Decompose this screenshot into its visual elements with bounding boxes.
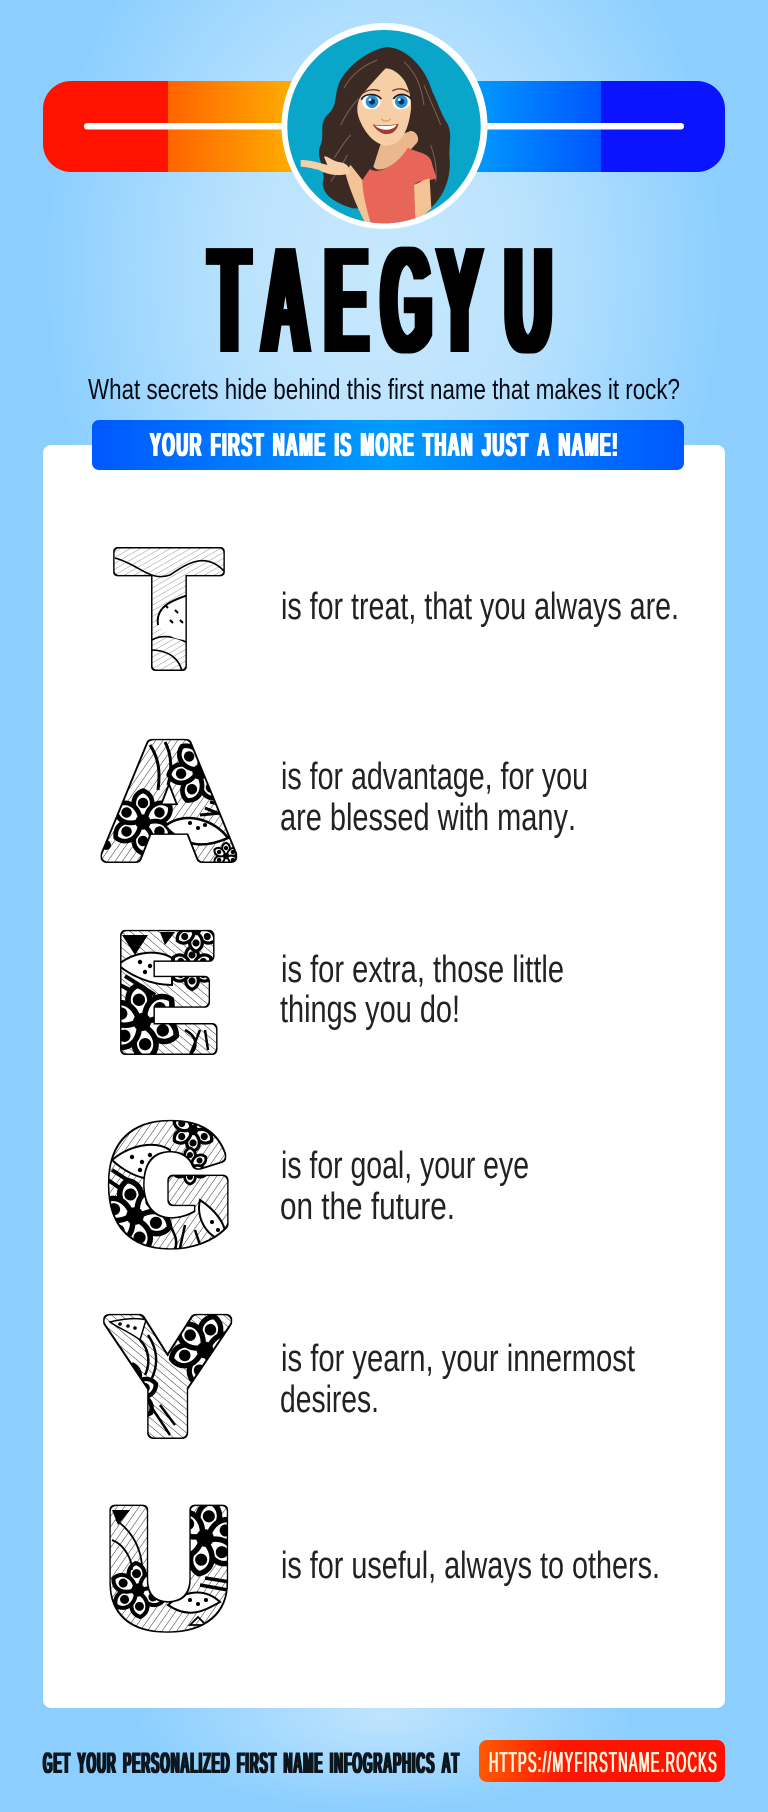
text for G: on the future.	[280, 1186, 455, 1228]
row G	[108, 1120, 528, 1250]
row A	[100, 738, 586, 863]
decorated letter G	[108, 1120, 229, 1250]
row T	[113, 547, 676, 671]
text for A: are blessed with many.	[280, 797, 576, 839]
text for Y	[280, 1338, 635, 1421]
footer URL button	[479, 1740, 725, 1782]
decorated letter A	[100, 738, 238, 863]
row E	[120, 930, 563, 1055]
header gradient bar	[43, 81, 725, 172]
text for A: is for advantage, for you	[281, 756, 588, 798]
title: name: TAEGYU	[210, 216, 552, 384]
decorated letter U	[109, 1504, 228, 1633]
white content panel	[43, 445, 725, 1708]
portrait badge: cartoon woman	[282, 23, 488, 229]
banner: more than just a name	[92, 420, 684, 470]
text for G: is for goal, your eye	[281, 1145, 529, 1187]
decorated letter E	[120, 930, 218, 1055]
text for U: is for useful, always to others.	[281, 1545, 660, 1587]
decorated letter T	[113, 547, 225, 671]
row U	[109, 1504, 658, 1633]
row Y	[103, 1314, 635, 1439]
text for E: things you do!	[280, 989, 460, 1031]
text for G	[280, 1145, 529, 1228]
text for A	[280, 756, 588, 839]
text for Y: desires.	[280, 1379, 379, 1421]
text for Y: is for yearn, your innermost	[281, 1338, 635, 1380]
text for E	[280, 949, 564, 1031]
decorated letter Y	[103, 1314, 232, 1439]
text for E: is for extra, those little	[281, 949, 564, 991]
